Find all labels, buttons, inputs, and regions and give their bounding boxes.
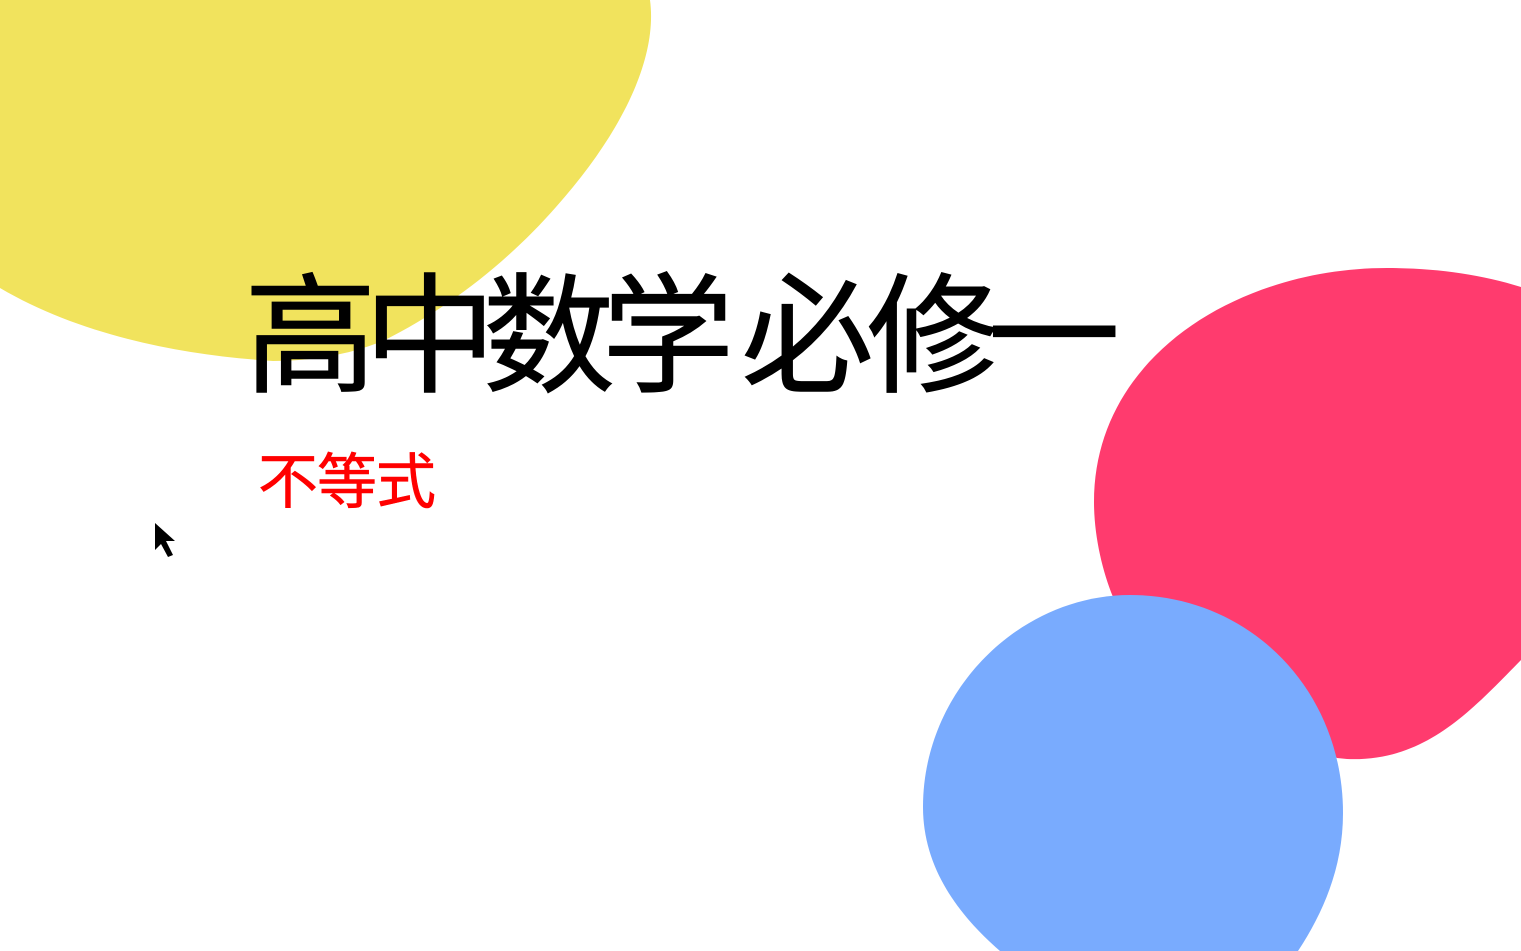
title: 高中数学 必修一 bbox=[244, 264, 1120, 410]
shape: yellow blob bbox=[0, 0, 651, 361]
shape: blue blob bbox=[923, 595, 1343, 951]
subtitle: 不等式 bbox=[258, 449, 436, 516]
shape: red blob bbox=[1094, 268, 1521, 759]
icon: mouse cursor bbox=[155, 523, 175, 557]
